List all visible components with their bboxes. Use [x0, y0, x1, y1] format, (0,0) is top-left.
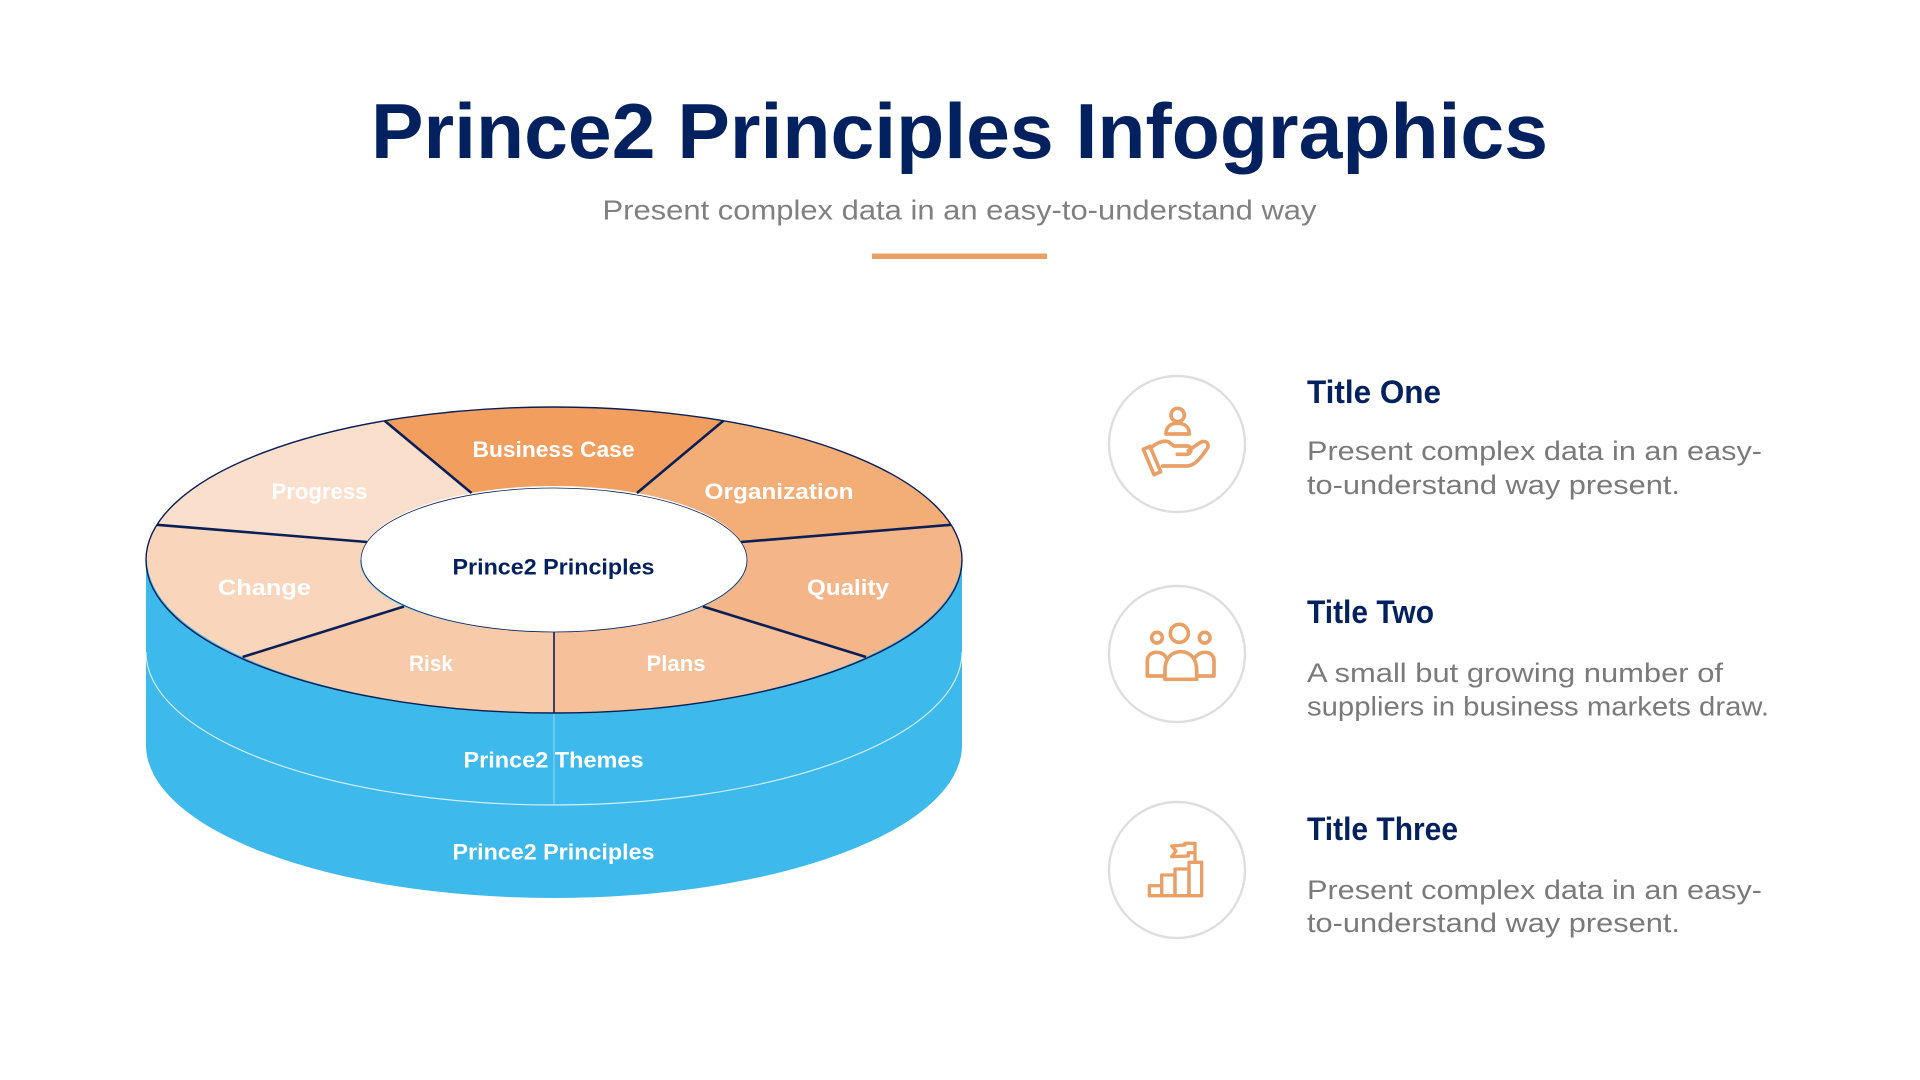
label: Organization: Organization — [704, 479, 854, 504]
label: Prince2 Principles centre: Prince2 Principles — [452, 554, 654, 580]
icon circle — [1109, 802, 1245, 938]
body text — [1307, 875, 1762, 938]
body text: to-understand way present. — [1307, 908, 1680, 938]
subtitle: Present complex data in an easy-to-understand way — [602, 194, 1316, 226]
item: Title One — [1109, 374, 1762, 512]
item: Title Two — [1109, 586, 1769, 722]
icon: hand holding person — [1143, 408, 1208, 475]
label: Prince2 Principles base: Prince2 Principles — [452, 840, 654, 864]
icon: group of people — [1147, 624, 1214, 679]
label: Plans: Plans — [646, 651, 706, 676]
body text: Present complex data in an easy- — [1307, 875, 1762, 905]
label: Quality: Quality — [807, 575, 890, 600]
segment: Quality — [703, 525, 961, 657]
heading: Title Three — [1307, 811, 1458, 847]
icon circle — [1109, 586, 1245, 722]
disk: layer divider — [146, 652, 962, 805]
accent bar — [872, 254, 1047, 259]
disk: blue cylinder side — [146, 560, 962, 898]
body text: A small but growing number of — [1307, 658, 1724, 688]
segment: Risk — [243, 606, 554, 713]
label: Business Case: Business Case — [472, 437, 634, 462]
segment: Change — [147, 525, 404, 657]
title: Prince2 Principles Infographics — [371, 87, 1548, 175]
disk: segment spokes — [157, 421, 951, 713]
icon: steps with flag — [1149, 843, 1202, 896]
body text: to-understand way present. — [1307, 470, 1680, 500]
item: Title Three — [1109, 802, 1762, 938]
label: Progress: Progress — [272, 479, 368, 504]
disk: top rim — [146, 407, 962, 713]
heading: Title Two — [1307, 594, 1434, 630]
segment: Business Case — [385, 407, 723, 493]
label: Change: Change — [218, 575, 311, 600]
body text: suppliers in business markets draw. — [1307, 692, 1769, 722]
disk: centre hole — [361, 488, 747, 632]
body text: Present complex data in an easy- — [1307, 436, 1762, 466]
segment: Progress — [157, 421, 472, 542]
segment: Plans — [554, 606, 866, 713]
label: Risk: Risk — [409, 651, 454, 676]
label: Prince2 Themes: Prince2 Themes — [464, 748, 644, 772]
segment: Organization — [637, 421, 951, 542]
heading: Title One — [1307, 374, 1441, 410]
body text — [1307, 436, 1762, 500]
body text — [1307, 658, 1769, 722]
chart: layered disk — [146, 407, 962, 898]
icon circle — [1109, 376, 1245, 512]
